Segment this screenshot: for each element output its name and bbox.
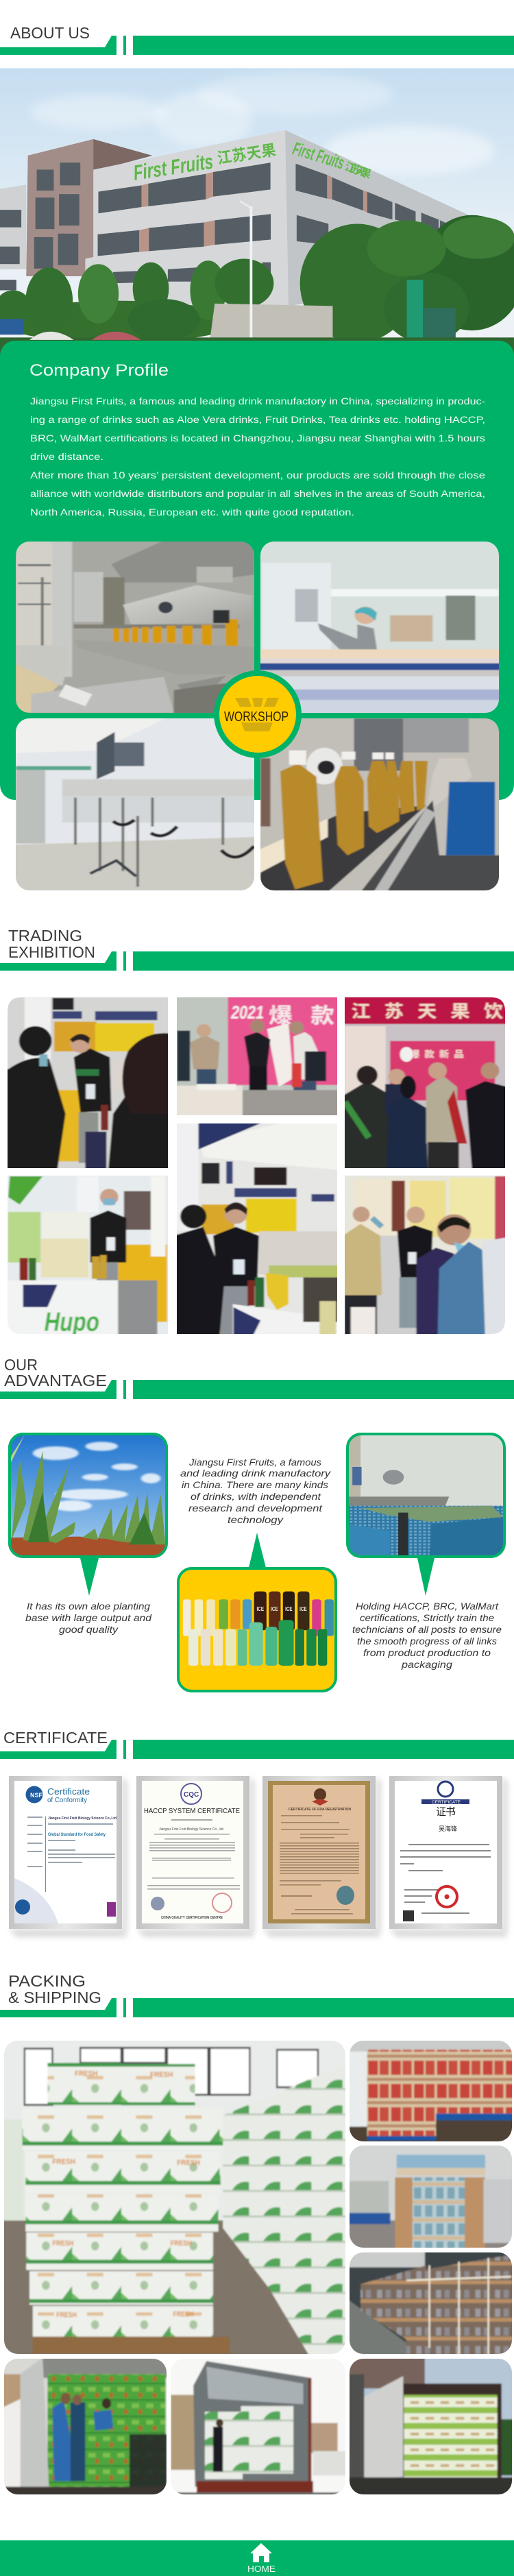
- heading: company profile: Company Profile: [29, 361, 169, 380]
- certificate: HACCP: [136, 1776, 255, 1937]
- faded W watermark: [235, 698, 279, 731]
- photo: exhibition booth D: [5, 1174, 171, 1337]
- advantage: aloe planting base: [8, 1433, 169, 1635]
- sign: First Fruits wordmark: 江苏天果: [216, 141, 277, 167]
- certificate: NSF: NSF: [30, 1792, 43, 1799]
- arrow: down to caption: [417, 1558, 435, 1596]
- caption: aloe base: base with large output and: [25, 1613, 152, 1623]
- sign: First Fruits wordmark: 江苏天果: [343, 160, 373, 181]
- header: trading exhibition: TRADING: [8, 927, 82, 945]
- caption: aloe base: [25, 1601, 152, 1635]
- photo: stacked aloe vera boxes in warehouse: FRESH: [150, 2071, 173, 2079]
- photo: exhibition booth D: Hupo: [45, 1307, 99, 1337]
- header: our advantage: [0, 1356, 514, 1399]
- photo: wrapped water pallets: [347, 2143, 514, 2250]
- caption: first fruits range: research and development: [188, 1503, 323, 1514]
- photo: amber bottles on conveyor: [258, 716, 502, 895]
- panel: company profile: [0, 341, 514, 800]
- certificate: NSF: Certificate: [47, 1786, 90, 1797]
- header: certificate: CERTIFICATE: [3, 1729, 108, 1747]
- certificate: FDA: CERTIFICATE OF FDA REGISTRATION: [289, 1808, 351, 1812]
- caption: first fruits range: Jiangsu First Fruits, a famous: [188, 1457, 321, 1468]
- header: trading exhibition: EXHIBITION: [8, 943, 95, 961]
- certificate: NSF: Global Standard for Food Safety: [48, 1833, 106, 1837]
- advantage: certified production: [346, 1433, 506, 1670]
- text: company description: ing a range of drinks such as Aloe Vera drinks, Fruit Drinks, Tea drinks etc. holding HACCP,: [30, 414, 485, 425]
- header: trading exhibition: [0, 927, 514, 971]
- certificate: CCIC: 证书: [436, 1806, 456, 1818]
- photo: red pallet boxes: [347, 2039, 514, 2143]
- caption: aloe base: It has its own aloe planting: [27, 1601, 151, 1612]
- photo: filling machine: [13, 538, 257, 716]
- text: company description: After more than 10 years’ persistent development, our products are sold through the close: [30, 470, 485, 481]
- certificate: HACCP: HACCP SYSTEM CERTIFICATE: [144, 1808, 240, 1815]
- certificate: CCIC: [389, 1776, 508, 1937]
- caption: first fruits range: in China. There are many kinds: [182, 1480, 328, 1490]
- photo: stacked aloe vera boxes in warehouse: FRESH: [53, 2159, 75, 2166]
- caption: first fruits range: technology: [228, 1515, 284, 1525]
- photo: truck container with pallets: [168, 2355, 348, 2498]
- photo: worker on bottling line: [258, 538, 502, 716]
- certificate: NSF: [9, 1776, 127, 1937]
- photo: stacked aloe vera boxes in warehouse: FRESH: [177, 2159, 200, 2167]
- photo: drink bottles on yellow: ICE: [299, 1606, 307, 1612]
- header: about us: [0, 24, 514, 55]
- text: company description: [30, 396, 485, 518]
- text: company description: drive distance.: [30, 451, 103, 462]
- caption: aloe base: good quality: [59, 1625, 119, 1635]
- icon: home: [250, 2543, 272, 2562]
- photo: exhibition booth B: 爆款: [269, 1004, 334, 1028]
- photo: exhibition booth C: 江 苏 天 果 饮: [352, 1001, 503, 1021]
- photo: strapped pallets in warehouse: [347, 2250, 514, 2357]
- header: packing and shipping: PACKING: [8, 1972, 86, 1990]
- certificate: NSF: of Conformity: [47, 1797, 87, 1804]
- photo: exhibition booth C: [343, 995, 508, 1170]
- caption: certifications: Holding HACCP, BRC, WalMart: [356, 1601, 499, 1612]
- arrow: up to caption: [249, 1533, 266, 1568]
- label: workshop: WORKSHOP: [224, 709, 289, 725]
- photo: drink bottles on yellow: ICE: [257, 1606, 264, 1612]
- caption: certifications: [352, 1601, 502, 1670]
- certificate: HACCP: CHINA QUALITY CERTIFICATION CENTRE: [161, 1916, 223, 1920]
- photo: stacked aloe vera boxes in warehouse: FRESH: [53, 2239, 74, 2248]
- header: about us: ABOUT US: [10, 24, 90, 42]
- header: packing and shipping: [0, 1972, 514, 2017]
- badge: workshop: [214, 670, 302, 758]
- header: packing and shipping: & SHIPPING: [8, 1989, 101, 2006]
- photo: stacked aloe vera boxes in warehouse: FRESH: [56, 2311, 77, 2320]
- arrow: down to caption: [80, 1558, 99, 1596]
- caption: first fruits range: [180, 1457, 332, 1525]
- caption: certifications: packaging: [401, 1660, 453, 1670]
- photo: exhibition booth F: [343, 1174, 508, 1337]
- text: company description: alliance with worldwide distributors and popular in all shelves in the areas of South America,: [30, 488, 485, 499]
- caption: certifications: certifications, Strictly train the: [360, 1613, 494, 1623]
- photo: workers loading container: [1, 2355, 171, 2498]
- certificate: FDA: [262, 1776, 381, 1937]
- photo: factory building: [0, 68, 514, 365]
- certificate: CCIC: CERTIFICATE: [432, 1801, 461, 1805]
- photo: stacked aloe vera boxes in warehouse: [1, 2037, 349, 2359]
- header: our advantage: ADVANTAGE: [4, 1372, 107, 1389]
- caption: certifications: technicians of all posts to ensure: [352, 1625, 502, 1635]
- photo: stacked aloe vera boxes in warehouse: FRESH: [75, 2070, 98, 2078]
- photo: loaded container: [347, 2355, 514, 2498]
- photo: aloe field: [8, 1433, 169, 1558]
- caption: certifications: from product production to: [363, 1648, 491, 1658]
- text: company description: North America, Russia, European etc. with quite good reputation.: [30, 507, 354, 518]
- text: company description: Jiangsu First Fruits, a famous and leading drink manufactory in China, specializing in produc-: [30, 396, 485, 406]
- sign: First Fruits wordmark: First Fruits: [291, 139, 346, 173]
- photo: stacked aloe vera boxes in warehouse: FRESH: [173, 2311, 193, 2319]
- photo: exhibition booth E: [173, 1121, 341, 1337]
- sign: First Fruits wordmark: [132, 139, 373, 185]
- photo: drink bottles on yellow: [177, 1567, 338, 1693]
- photo: exhibition booth C: 爆款新品: [410, 1049, 464, 1059]
- photo: stacked aloe vera boxes in warehouse: FRESH: [171, 2239, 192, 2248]
- caption: first fruits range: and leading drink manufactory: [180, 1468, 332, 1479]
- caption: certifications: the smooth progress of all links: [357, 1636, 497, 1647]
- text: company description: BRC, WalMart certifications is located in Changzhou, Jiangsu near Shanghai with 1.5 hours: [30, 433, 485, 443]
- photo: exhibition booth B: [173, 995, 341, 1118]
- advantage: product range: [177, 1457, 338, 1693]
- caption: first fruits range: of drinks, with independent: [191, 1492, 321, 1502]
- sign: First Fruits wordmark: First Fruits: [132, 150, 215, 185]
- certificates row: [9, 1776, 508, 1937]
- header: certificate: [0, 1729, 514, 1759]
- photo: drink bottles on yellow: ICE: [285, 1606, 293, 1612]
- photo: drink bottles on yellow: ICE: [271, 1606, 278, 1612]
- certificate: NSF: Jiangsu First Fruit Biology Science Co.,Ltd: [48, 1816, 117, 1821]
- certificate: HACCP: CQC: [184, 1791, 199, 1799]
- footer: home bar: [0, 2540, 514, 2576]
- header: our advantage: OUR: [4, 1356, 38, 1374]
- label: home: HOME: [247, 2564, 276, 2574]
- certificate: CCIC: 吴海锋: [439, 1825, 457, 1832]
- photo: exhibition booth A: [5, 995, 171, 1170]
- photo: conveyor line room: [13, 716, 257, 895]
- photo: aloe in crates: [346, 1433, 506, 1558]
- certificate: HACCP: Jiangsu First Fruit Biology Science Co., ltd.: [159, 1827, 224, 1832]
- photo: exhibition booth B: 2021: [230, 1001, 264, 1023]
